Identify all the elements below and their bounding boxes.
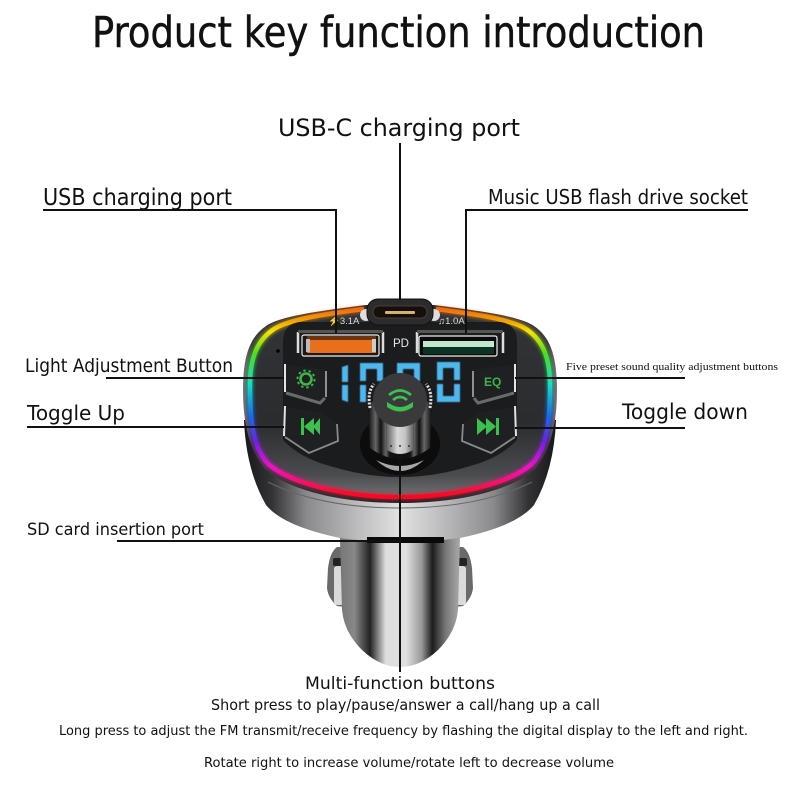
indicator hole: [276, 349, 280, 353]
control panel: [283, 322, 517, 477]
toggle up button: [284, 406, 338, 454]
label: Toggle down: Toggle down: [621, 400, 748, 424]
heading: Multi-function buttons: Multi-function buttons: [305, 674, 495, 694]
port labels: PD: [393, 338, 409, 350]
label: USB charging port: [43, 185, 336, 333]
text: long press: Long press to adjust the FM transmit/receive frequency by flashing the digital display to the left and right.: [59, 723, 748, 739]
USB charging port: orange: [298, 330, 383, 356]
port labels: ⚡3.1A: [328, 315, 360, 327]
label: SD card insertion port: SD card insertion port: [27, 520, 204, 540]
plug barrel: [327, 538, 473, 667]
label: USB charging port: USB charging port: [43, 185, 232, 211]
digital display 1000: [342, 362, 460, 402]
collar seam line: [268, 482, 532, 508]
label: Music USB flash drive socket: Music USB flash drive socket: [488, 185, 748, 209]
label: Music USB flash drive socket: [466, 185, 748, 333]
USB-C port: [360, 299, 440, 325]
multi-function knob: [360, 373, 440, 475]
port labels: ♫1.0A: [438, 316, 465, 327]
SD card slot: [367, 537, 444, 543]
EQ button: EQ: [484, 375, 501, 389]
label: USB-C charging port: USB-C charging port: [278, 114, 520, 142]
label: Toggle Up: Toggle Up: [26, 401, 125, 425]
text: short press: Short press to play/pause/answer a call/hang up a call: [211, 696, 600, 714]
label: Light Adjustment Button: Light Adjustment Button: [25, 355, 233, 377]
title: Product key function introduction: [92, 8, 705, 58]
body shell: [243, 305, 557, 503]
text: rotate: Rotate right to increase volume/rotate left to decrease volume: [204, 755, 614, 771]
device: car FM transmitter: [243, 299, 557, 667]
ring interior: [250, 309, 550, 497]
port labels: [328, 315, 465, 350]
RGB light ring: [250, 309, 550, 497]
collar: [244, 420, 556, 542]
label: Five preset sound quality adjustment buttons: Five preset sound quality adjustment buttons: [566, 362, 778, 373]
USB socket: green: [417, 330, 503, 356]
leader line: multi-function buttons: [399, 455, 401, 672]
EQ button: [473, 364, 515, 404]
toggle down button: [462, 406, 516, 454]
light adjustment button: [285, 364, 326, 404]
